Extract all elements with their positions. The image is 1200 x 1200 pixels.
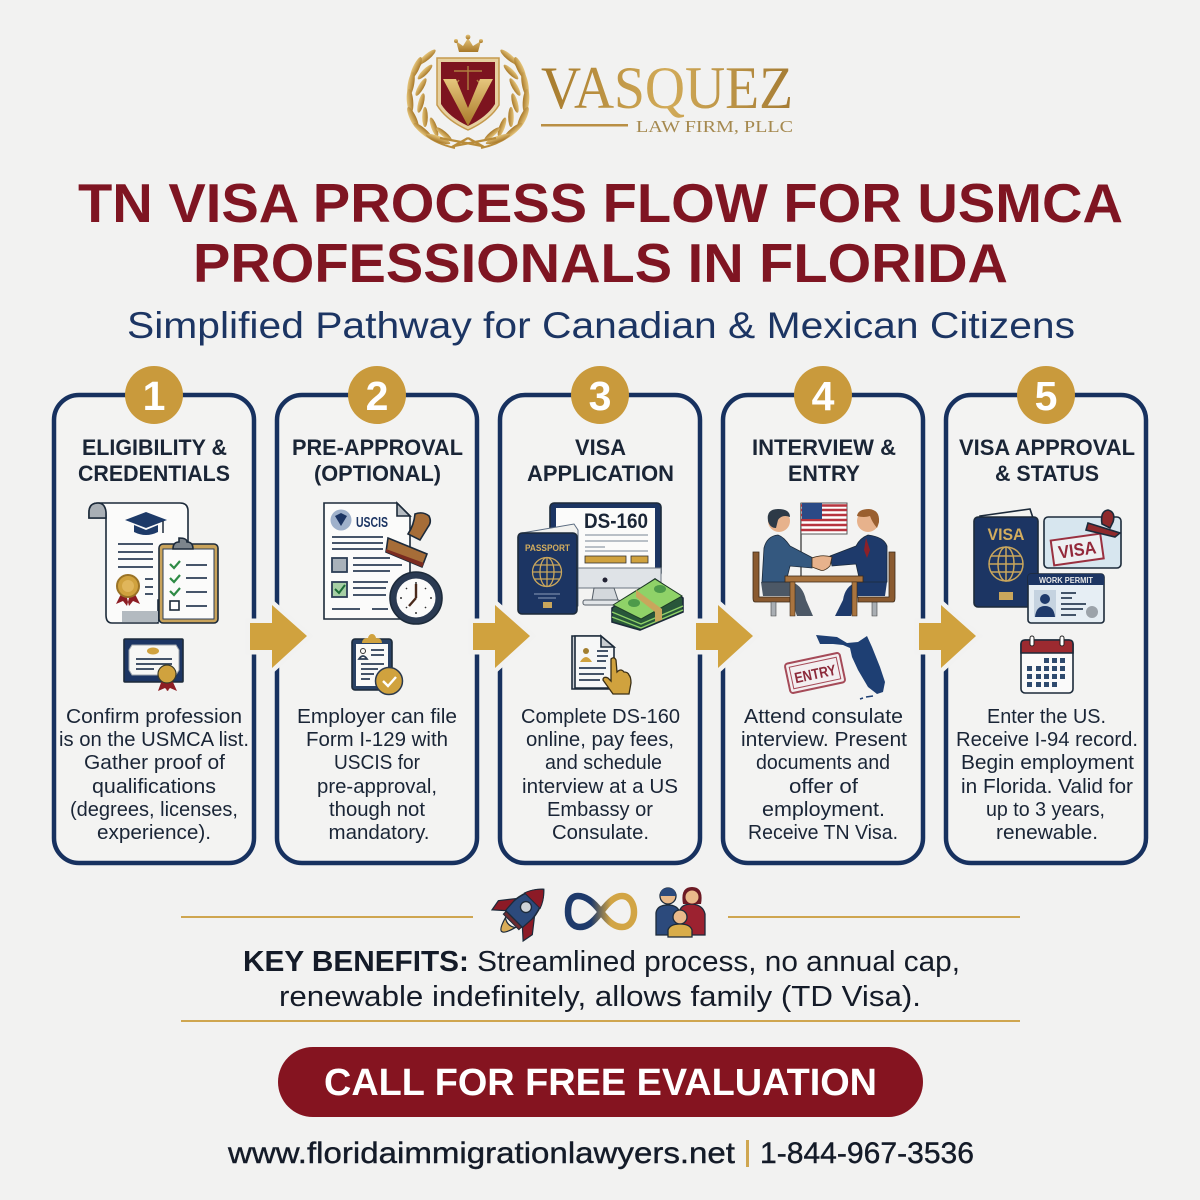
body text: (degrees, licenses,	[70, 799, 238, 821]
icon: visa passport, stamp and work permit: VISA	[1057, 537, 1097, 563]
body text: online, pay fees,	[526, 729, 674, 751]
icon: infinity	[568, 896, 634, 927]
body text: qualifications	[92, 776, 216, 798]
step number 5	[1017, 366, 1075, 424]
call to action button: CALL FOR FREE EVALUATION	[324, 1062, 877, 1104]
body text: experience).	[97, 822, 211, 844]
icon: USCIS form with stamp and clock: USCIS	[356, 515, 388, 531]
step number 3: 3	[589, 373, 611, 419]
body text: Begin employment	[961, 752, 1134, 774]
arrow: step 2 to 3	[473, 605, 530, 668]
arrow: step 4 to 5	[919, 605, 976, 668]
body text: Attend consulate	[744, 706, 903, 728]
panel: step 1	[54, 366, 254, 863]
panel: step 4	[723, 366, 923, 863]
icon: rocket	[485, 872, 561, 948]
icon: DS-160 monitor, passport and money	[518, 503, 683, 630]
body text	[956, 706, 1138, 844]
body text: USCIS for	[334, 752, 420, 774]
title: PROFESSIONALS IN FLORIDA	[193, 232, 1008, 294]
icon: family	[656, 887, 705, 937]
body text: Confirm profession	[66, 706, 242, 728]
icon: visa passport, stamp and work permit	[974, 509, 1121, 623]
icon: clipboard with check	[352, 634, 402, 694]
body text: Form I-129 with	[306, 729, 448, 751]
body text: Enter the US.	[987, 706, 1106, 728]
body text: Complete DS-160	[521, 706, 680, 728]
logo	[405, 35, 793, 148]
icon: interview handshake with flag	[753, 503, 895, 616]
arrow: step 3 to 4	[696, 605, 753, 668]
body text: Embassy or	[547, 799, 653, 821]
call to action button	[278, 1047, 923, 1117]
body text: Consulate.	[552, 822, 649, 844]
panel: step 5	[946, 366, 1146, 863]
step number 2	[348, 366, 406, 424]
benefits divider top	[181, 916, 1020, 918]
icon: Florida map and entry stamp: ENTRY	[793, 662, 838, 687]
brand subtitle: LAW FIRM, PLLC	[636, 117, 793, 136]
body text: mandatory.	[328, 822, 430, 844]
step number 4	[794, 366, 852, 424]
body text: is on the USMCA list.	[59, 729, 249, 751]
icon: USCIS form with stamp and clock	[324, 503, 442, 624]
contact line: www.floridaimmigrationlawyers.net	[227, 1137, 736, 1170]
icon: calendar	[1021, 636, 1073, 693]
key benefits text	[243, 946, 960, 1013]
heading: (OPTIONAL)	[314, 461, 441, 486]
body text	[521, 706, 680, 844]
arrow: step 1 to 2	[250, 605, 307, 668]
body text: though not	[329, 799, 425, 821]
icon: certificate	[124, 639, 183, 691]
icon: left laurel	[405, 48, 482, 148]
brand name: VASQUEZ	[541, 55, 793, 121]
title	[78, 172, 1123, 294]
body text	[297, 706, 457, 844]
body text: Gather proof of	[84, 752, 225, 774]
body text: Employer can file	[297, 706, 457, 728]
subtitle: Simplified Pathway for Canadian & Mexican Citizens	[127, 305, 1075, 346]
icon: visa passport, stamp and work permit: VISA	[988, 525, 1024, 544]
icon: form with pointing hand	[572, 636, 631, 694]
heading: INTERVIEW &	[752, 435, 896, 460]
icon: crown	[454, 35, 483, 52]
icon: diploma scroll and checklist	[89, 503, 218, 623]
heading: PRE-APPROVAL	[292, 435, 463, 460]
body text: renewable.	[996, 822, 1098, 844]
key benefits text: renewable indefinitely, allows family (TD Visa).	[279, 981, 921, 1013]
body text: interview at a US	[522, 776, 678, 798]
step number 4: 4	[812, 373, 835, 419]
panel: step 3	[500, 366, 700, 863]
step number 2: 2	[366, 373, 388, 419]
heading: ENTRY	[788, 461, 860, 486]
step number 1	[125, 366, 183, 424]
step number 5: 5	[1035, 373, 1057, 419]
contact line: 1-844-967-3536	[760, 1137, 974, 1170]
body text: interview. Present	[741, 729, 907, 751]
heading: CREDENTIALS	[78, 461, 230, 486]
heading: ELIGIBILITY &	[82, 435, 227, 460]
panel: step 2	[277, 366, 477, 863]
body text	[741, 706, 907, 844]
body text: up to 3 years,	[986, 799, 1105, 821]
heading	[527, 435, 674, 486]
heading: & STATUS	[995, 461, 1099, 486]
body text: Receive TN Visa.	[748, 822, 898, 844]
body text	[59, 706, 249, 844]
step number 3	[571, 366, 629, 424]
key benefits text: KEY BENEFITS: Streamlined process, no annual cap,	[243, 946, 960, 978]
heading	[78, 435, 230, 486]
body text: and schedule	[545, 752, 662, 774]
heading: VISA	[575, 435, 626, 460]
heading	[292, 435, 463, 486]
heading: VISA APPROVAL	[959, 435, 1135, 460]
brand rule	[541, 124, 628, 126]
icon: DS-160 monitor, passport and money: DS-160	[584, 510, 648, 533]
body text: Receive I-94 record.	[956, 729, 1138, 751]
body text: in Florida. Valid for	[961, 776, 1133, 798]
heading: APPLICATION	[527, 461, 674, 486]
heading	[959, 435, 1135, 486]
contact line	[227, 1137, 974, 1170]
step number 1: 1	[143, 373, 165, 419]
body text: offer of	[789, 776, 858, 798]
icon: Florida map and entry stamp	[784, 635, 885, 699]
body text: pre-approval,	[317, 776, 437, 798]
benefits divider bottom	[181, 1020, 1020, 1022]
title: TN VISA PROCESS FLOW FOR USMCA	[78, 172, 1123, 234]
body text: documents and	[756, 752, 890, 774]
icon: shield	[437, 58, 499, 130]
body text: employment.	[762, 799, 885, 821]
icon: visa passport, stamp and work permit: WORK PERMIT	[1039, 576, 1093, 585]
icon: DS-160 monitor, passport and money: PASSPORT	[525, 543, 570, 554]
heading	[752, 435, 896, 486]
icon: right laurel	[454, 48, 531, 148]
